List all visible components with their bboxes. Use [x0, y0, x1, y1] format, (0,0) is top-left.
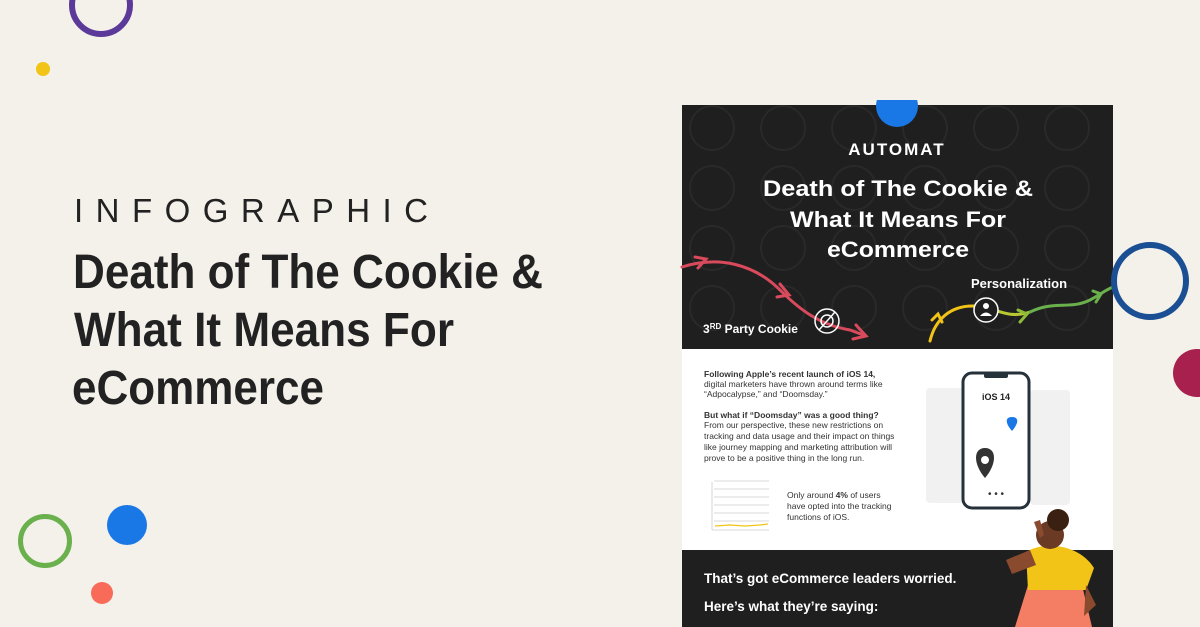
infographic card [682, 85, 1113, 627]
bottom dark section: Here’s what they’re saying: [704, 599, 878, 614]
intro text block: Following Apple’s recent launch of iOS 14, [704, 369, 875, 379]
illustration: worried woman [1006, 509, 1096, 627]
main title: Death of The Cookie & [73, 246, 543, 299]
decoration: navy ring [1114, 245, 1186, 317]
intro text block: “Adpocalypse,” and “Doomsday.” [704, 389, 828, 399]
stat text: 4%: have opted into the tracking [787, 501, 892, 511]
stat text: 4% [787, 490, 892, 522]
card title: eCommerce [827, 237, 969, 262]
main title: eCommerce [72, 362, 324, 415]
stat text: 4%: Only around 4% of users [787, 490, 881, 500]
label: personalization: Personalization [971, 276, 1067, 291]
main title: What It Means For [74, 304, 454, 357]
arrow: declining cookie line [682, 257, 866, 339]
decoration: crimson dot [1173, 349, 1200, 397]
card title: Death of The Cookie & [763, 176, 1033, 201]
decoration: orange dot [91, 582, 113, 604]
intro text block: like journey mapping and marketing attribution will [704, 442, 892, 452]
illustration: phone with iOS 14 [926, 372, 1070, 508]
icon: crossed cookie [815, 309, 839, 333]
bottom dark section: That’s got eCommerce leaders worried. [704, 571, 956, 586]
decoration: yellow dot [36, 62, 50, 76]
intro text block: digital marketers have thrown around terms like [704, 379, 883, 389]
intro text block [704, 369, 894, 463]
intro text block: But what if “Doomsday” was a good thing? [704, 410, 879, 420]
label: 3rd party cookie: 3 [703, 322, 710, 336]
card header: dark [682, 105, 1113, 349]
icon: person [974, 298, 998, 322]
logo: AUTOMAT: AUTOMAT [848, 140, 946, 159]
intro text block: prove to be a positive thing in the long run. [704, 453, 864, 463]
card title: What It Means For [790, 207, 1006, 232]
mini line chart [712, 481, 769, 530]
label: INFOGRAPHIC: INFOGRAPHIC [74, 192, 428, 229]
card title [763, 176, 1033, 262]
label: 3rd party cookie: RD [710, 322, 721, 331]
arrow: rising personalization line [930, 287, 1113, 341]
main title [72, 246, 543, 415]
stat text: 4%: functions of iOS. [787, 512, 849, 522]
decoration: green ring [20, 516, 70, 566]
decoration: purple ring [72, 0, 130, 34]
illustration: phone with iOS 14: • • • [988, 489, 1005, 500]
bottom dark section [682, 550, 1113, 627]
illustration: phone with iOS 14: iOS 14 [982, 392, 1010, 402]
intro text block: From our perspective, these new restrictions on [704, 420, 883, 430]
intro text block: tracking and data usage and their impact on things [704, 431, 894, 441]
label: 3rd party cookie: Party Cookie [721, 322, 798, 336]
decoration: blue dot on card top [876, 100, 918, 127]
decoration: blue dot [107, 505, 147, 545]
